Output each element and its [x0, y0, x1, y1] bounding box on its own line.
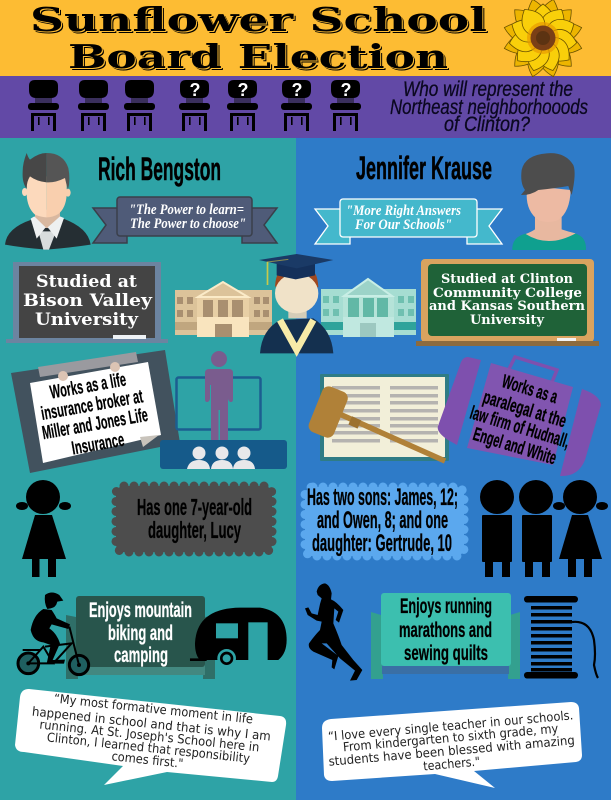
- background: left teal column: [0, 0, 296, 800]
- icon: daughter silhouette: [16, 480, 71, 577]
- panel: Rich hobbies: camping: [114, 644, 168, 667]
- question text: [390, 78, 588, 136]
- speech bubble: Jennifer quote: [322, 702, 582, 788]
- chalkboard: Jennifer education: and Kansas Southern: [429, 299, 586, 314]
- speech bubble: Jennifer quote: teachers.": [423, 754, 481, 773]
- clipboard: Rich job: Insurance: [70, 430, 126, 460]
- callout: Jennifer family: [305, 484, 464, 557]
- chalkboard: Jennifer education: [416, 259, 599, 346]
- candidate name: Rich Bengston: Rich Bengston: [98, 151, 221, 187]
- speech bubble: Rich quote: [15, 689, 286, 785]
- title: Sunflower School: [31, 1, 488, 40]
- clipboard: Rich job: insurance broker at: [40, 386, 145, 425]
- callout: Jennifer family: and Owen, 8; and one: [317, 507, 448, 534]
- speech bubble: Rich quote: comes first.": [111, 748, 184, 771]
- speech bubble: Rich quote: running. At St. Joseph's School here in: [39, 717, 260, 755]
- banner: Jennifer slogan: [315, 199, 502, 244]
- banner: Jennifer slogan: For Our Schools": [354, 217, 452, 233]
- suitcase: Jennifer job: [438, 357, 601, 476]
- icon: thread spool: [524, 596, 598, 678]
- icon: speaker with audience: [160, 351, 287, 469]
- banner: Rich slogan: "The Power to learn=: [129, 202, 244, 218]
- icon: teal university building: [321, 279, 416, 337]
- icon: seven board chairs: ?: [238, 80, 248, 100]
- clipboard: Rich job: Miller and Jones Life: [41, 405, 150, 444]
- chalkboard: Rich education: University: [35, 310, 139, 330]
- banner: Jennifer slogan: "More Right Answers: [346, 203, 461, 219]
- speech bubble: Jennifer quote: students have been blessed with amazing: [328, 732, 575, 769]
- clipboard: Rich job: [11, 350, 180, 473]
- panel: Jennifer hobbies: sewing quilts: [404, 642, 488, 665]
- title: Board Election: [69, 38, 449, 77]
- question band: [0, 76, 611, 138]
- portrait: man: [5, 153, 91, 250]
- icon: sunflower: [502, 0, 584, 79]
- callout: Jennifer family: Has two sons: James, 12;: [307, 484, 458, 511]
- speech bubble: Rich quote: happened in school and that is why I am: [31, 704, 272, 744]
- chalkboard: Jennifer education: Studied at Clinton: [441, 272, 574, 287]
- icon: book and gavel: [307, 374, 449, 461]
- title: Board Election: [68, 37, 448, 76]
- icon: seven board chairs: ?: [190, 80, 200, 100]
- chalkboard: Jennifer education: Community College: [433, 286, 582, 301]
- icon: seven board chairs: ?: [292, 80, 302, 100]
- panel: Rich hobbies: Enjoys mountain: [89, 599, 192, 622]
- title: Sunflower School: [32, 2, 489, 41]
- callout: Rich family: [116, 486, 272, 552]
- chalkboard: Jennifer education: University: [470, 313, 544, 328]
- banner: Rich slogan: [93, 197, 277, 243]
- question text: of Clinton?: [444, 113, 530, 136]
- clipboard: Rich job: Works as a life: [48, 370, 128, 404]
- speech bubble: Rich quote: Clinton, I learned that responsibility: [46, 729, 251, 766]
- portrait: woman: [512, 153, 586, 250]
- speech bubble: Jennifer quote: “I love every single teacher in our schools.: [327, 707, 574, 744]
- header band: [0, 0, 611, 76]
- chalkboard: Rich education: Bison Valley: [23, 291, 153, 311]
- callout: Jennifer family: daughter: Gertrude, 10: [312, 530, 452, 557]
- panel: Rich hobbies: biking and: [108, 622, 173, 645]
- speech bubble: Jennifer quote: From kindergarten to sixth grade, my: [342, 721, 559, 754]
- chalkboard: Rich education: Studied at: [36, 272, 137, 292]
- chalkboard: Rich education: [6, 262, 168, 343]
- icon: graduate: [259, 254, 333, 353]
- panel: Jennifer hobbies: marathons and: [399, 619, 492, 642]
- question text: Who will represent the: [403, 78, 573, 101]
- icon: three children silhouettes: [480, 480, 608, 577]
- suitcase: Jennifer job: Works as a: [499, 371, 560, 408]
- candidate name: Jennifer Krause: Jennifer Krause: [356, 150, 492, 186]
- panel: Jennifer hobbies: [371, 593, 520, 679]
- callout: Rich family: daughter, Lucy: [148, 517, 241, 543]
- panel: Rich hobbies: [66, 596, 215, 679]
- title: Board Election: [70, 39, 450, 78]
- background: right blue column: [296, 0, 611, 800]
- callout: Rich family: Has one 7-year-old: [137, 494, 252, 520]
- icon: runner silhouette: [305, 583, 362, 681]
- title: [30, 0, 489, 78]
- icon: camper trailer: [190, 608, 287, 668]
- icon: mountain biker: [18, 592, 89, 675]
- icon: tan university building: [175, 282, 272, 337]
- icon: seven board chairs: ?: [340, 80, 352, 100]
- banner: Rich slogan: The Power to choose": [130, 216, 246, 232]
- icon: seven board chairs: [28, 80, 361, 131]
- speech bubble: Rich quote: “My most formative moment in life: [53, 691, 254, 726]
- panel: Jennifer hobbies: Enjoys running: [400, 595, 492, 618]
- title: Sunflower School: [30, 0, 487, 39]
